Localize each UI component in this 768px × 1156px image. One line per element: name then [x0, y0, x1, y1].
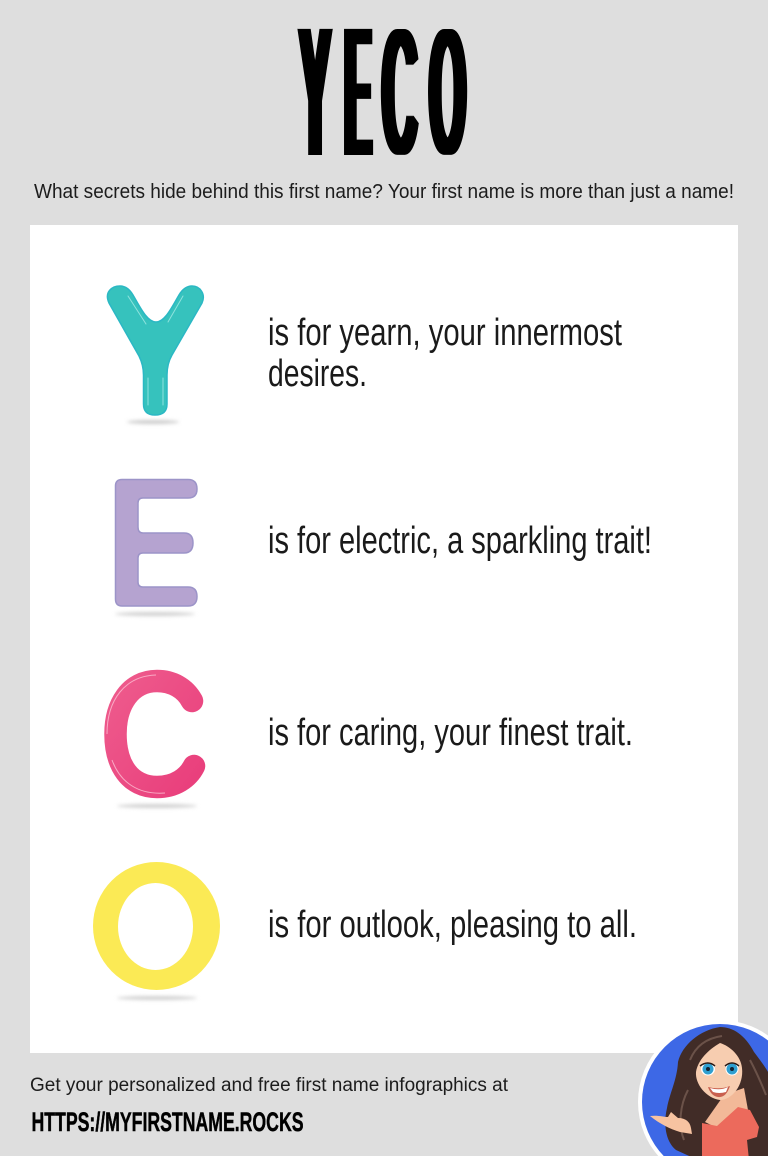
icon: letter C [107, 675, 197, 808]
text: E line: is for electric, a sparkling trait! [268, 520, 652, 562]
row: letter E [115, 480, 652, 616]
icon: avatar [638, 1020, 768, 1156]
text: C line: is for caring, your finest trait. [268, 712, 633, 754]
shirt [702, 1107, 759, 1156]
subtitle: What secrets hide behind this first name? Your first name is more than just a name! [34, 181, 734, 203]
panel: letters [30, 225, 738, 1053]
row: letter Y [107, 286, 622, 424]
hand [650, 1112, 692, 1134]
eyes [701, 1062, 715, 1076]
footer text: Get your personalized and free first name infographics at [30, 1075, 509, 1096]
neck [705, 1088, 748, 1128]
title [299, 0, 466, 200]
mouth [708, 1086, 730, 1097]
text: O line: is for outlook, pleasing to all. [268, 904, 637, 946]
face [696, 1043, 742, 1100]
footer url: HTTPS://MYFIRSTNAME.ROCKS [32, 1107, 304, 1137]
icon: letter E [115, 480, 197, 616]
text: Y line 2: desires. [268, 353, 367, 395]
row: letter C [107, 675, 633, 808]
hair [665, 1027, 768, 1156]
icon: letter O [93, 862, 220, 1000]
icon: letter Y [107, 286, 203, 424]
row: letter O [93, 862, 637, 1000]
text: Y line: is for yearn, your innermost [268, 312, 622, 354]
